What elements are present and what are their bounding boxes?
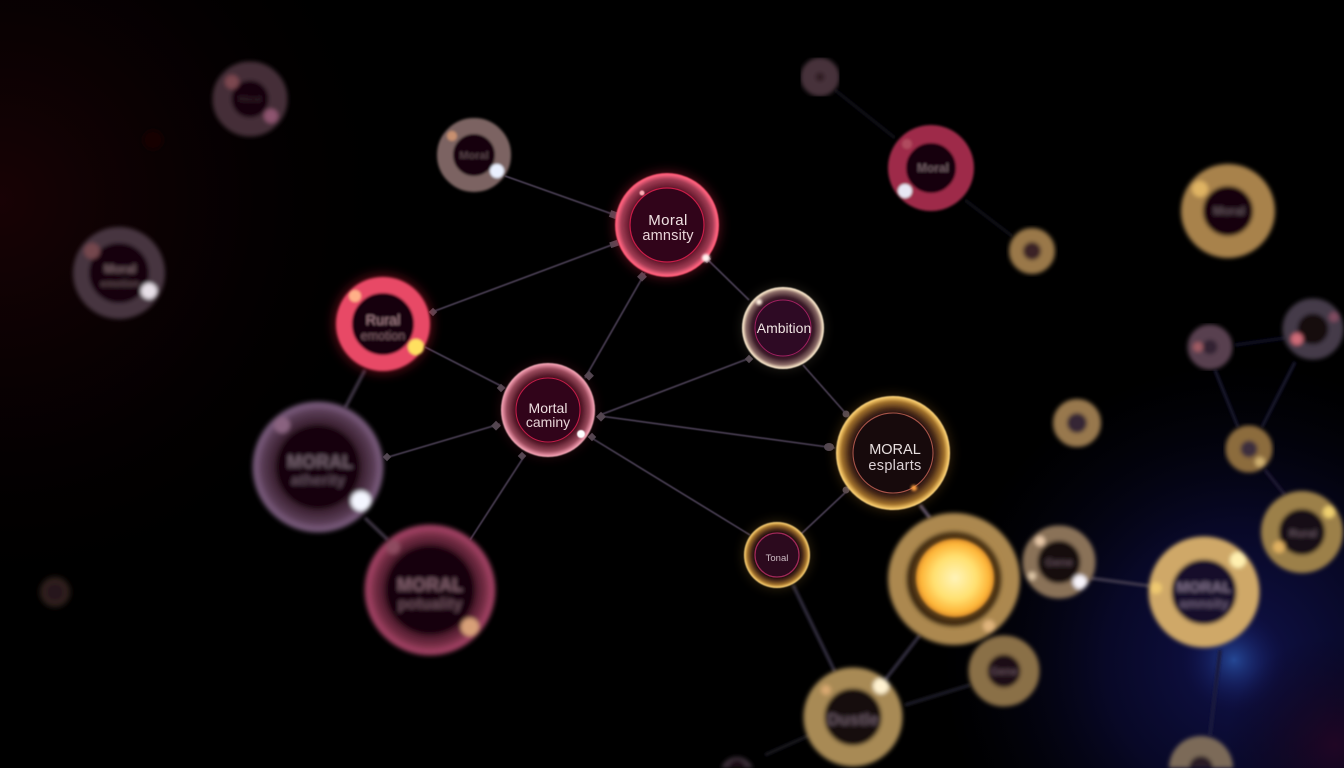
node: small gold upper [1016, 235, 1048, 267]
node: left Moral [81, 235, 157, 311]
node: Rural emotion [335, 276, 431, 372]
label: Rural [1289, 528, 1317, 540]
node: far right grey [1290, 306, 1339, 352]
node: tan lower [978, 645, 1030, 697]
node: rose Moral [897, 134, 965, 202]
node: upper left [222, 71, 278, 127]
label: Dustle [827, 710, 879, 729]
label: Rural [366, 313, 400, 329]
connection lines: sharp [385, 176, 848, 540]
label: Tonal [766, 553, 788, 564]
label: Ambition [757, 320, 811, 336]
node: MORAL esplarts [836, 396, 950, 510]
node: Moral amnsity: amnsity [642, 228, 694, 244]
label: Moral [1213, 204, 1245, 218]
node: Mortal caminy [501, 363, 595, 457]
connection lines: blurred [345, 90, 1295, 755]
node: top mauve [445, 126, 504, 184]
label: Gene [990, 666, 1018, 678]
node: Ambition [742, 287, 824, 369]
node: MORAL potuality [364, 524, 496, 656]
far background specks [43, 130, 163, 604]
node: left Moral: emotion [101, 279, 139, 290]
node: Moral amnsity [615, 173, 719, 277]
node: MORAL atherity: atherity [291, 472, 346, 489]
node: small gold right [1233, 433, 1265, 467]
label: Moral [648, 212, 688, 229]
node: small mauve [1193, 332, 1225, 362]
node: bottom right partial [1169, 736, 1233, 768]
node: gold far right [1270, 500, 1335, 564]
label: Gene [1045, 557, 1073, 569]
arrowheads [383, 210, 850, 494]
label: Moral [917, 161, 949, 175]
node: Rural emotion: emotion [361, 329, 405, 343]
label: Mortal [529, 400, 567, 416]
node: MORAL potuality: potuality [398, 596, 463, 613]
node: MORAL atherity [252, 401, 384, 533]
node: small gold middle [1060, 406, 1094, 440]
node: Mortal caminy: caminy [526, 414, 570, 430]
label: MORAL [397, 575, 463, 595]
label: Moral [104, 262, 136, 276]
node: gold upper right [1192, 175, 1264, 247]
node: bottom partial [721, 757, 753, 768]
node: top small [808, 65, 832, 89]
label: MORAL [869, 442, 921, 458]
label: MORAL [287, 452, 353, 472]
node: glowing sun [897, 522, 1011, 636]
node: tan beside sun [1028, 533, 1088, 591]
sun core [915, 538, 995, 618]
label: Moral [459, 150, 489, 162]
node: MORAL esplarts: esplarts [868, 458, 922, 474]
node: Tonal [744, 522, 810, 588]
node: MORAL amnsity right [1150, 548, 1248, 636]
node: Dustle [814, 678, 892, 756]
label: MORAL [1176, 579, 1232, 596]
node: MORAL amnsity right: amnsity [1179, 596, 1229, 611]
label: Moral [239, 94, 261, 104]
